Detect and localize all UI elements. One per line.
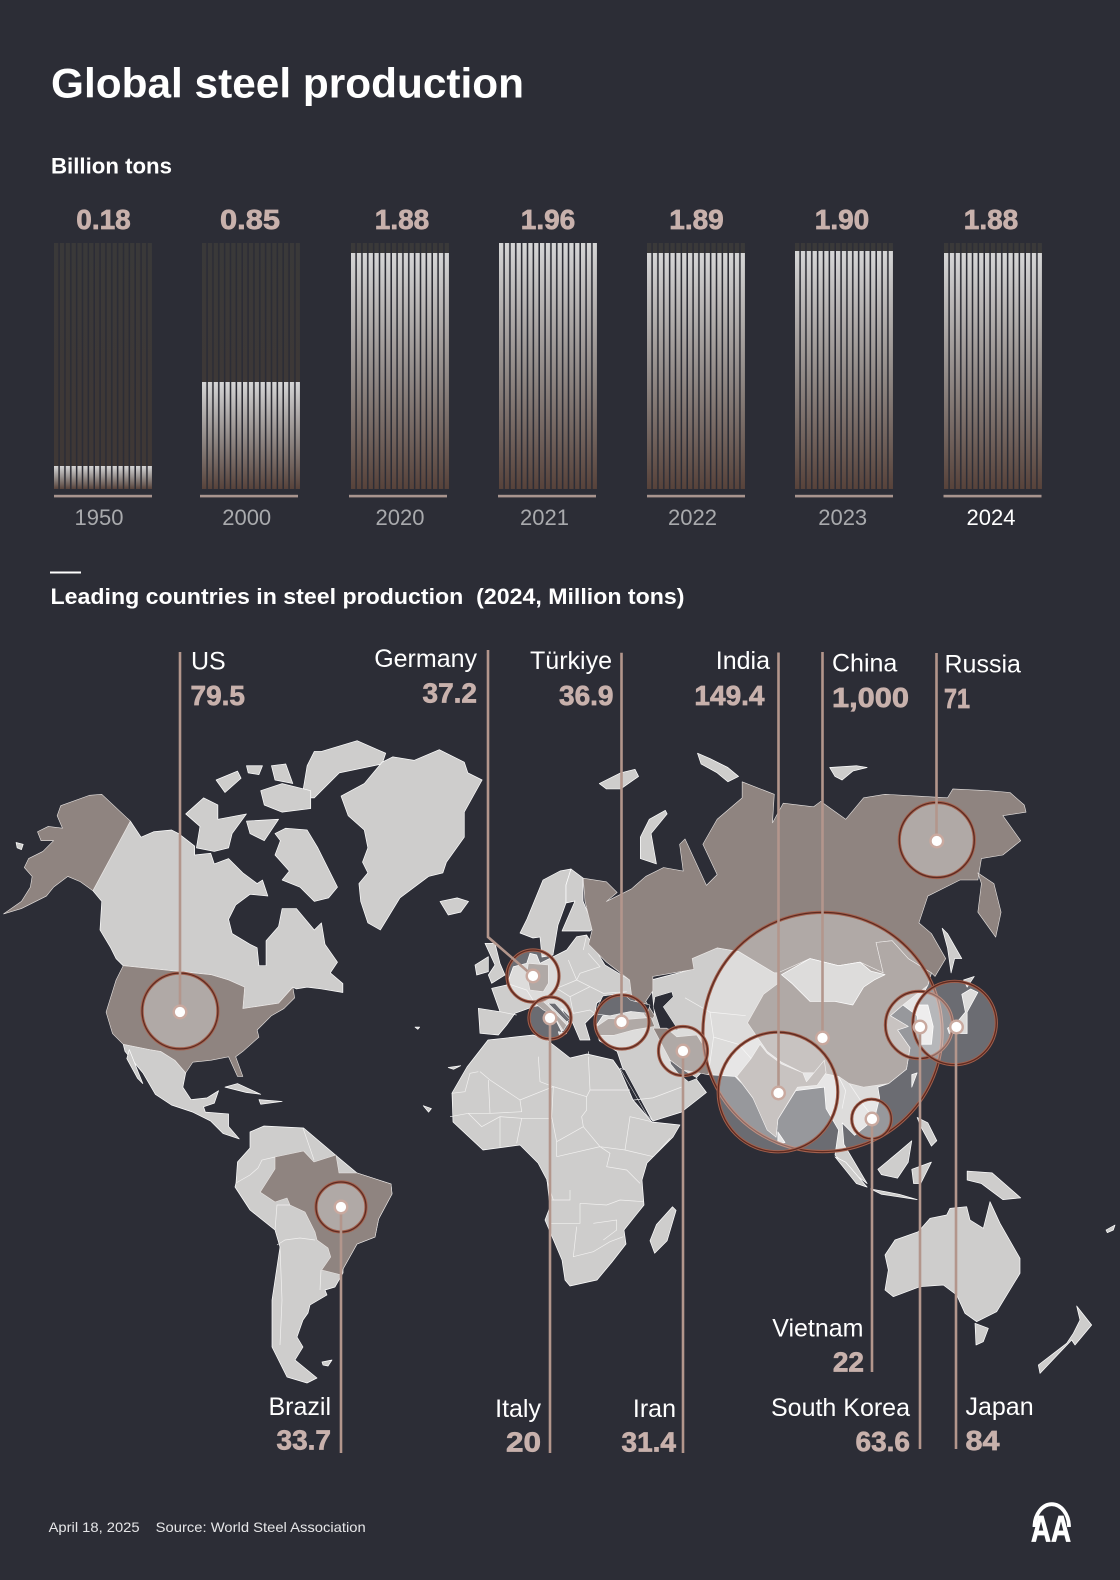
bar 2021: 2021 bbox=[520, 505, 569, 530]
bar 2000: 0.85 bbox=[220, 204, 280, 235]
label: Iran: 31.4 bbox=[622, 1426, 676, 1458]
label: Brazil bbox=[268, 1393, 331, 1456]
label: Japan: Japan bbox=[966, 1393, 1034, 1421]
label: Italy: Italy bbox=[495, 1395, 541, 1423]
label: Italy bbox=[495, 1395, 541, 1458]
bar 2020 bbox=[349, 204, 449, 530]
marker: Iran bbox=[658, 1026, 708, 1453]
label: Japan bbox=[966, 1393, 1034, 1456]
label: South Korea bbox=[771, 1394, 910, 1457]
label: US: US bbox=[191, 648, 226, 676]
bar 1950: 0.18 bbox=[76, 204, 131, 235]
label: Vietnam: 22 bbox=[833, 1346, 864, 1378]
map: Scandinavia bbox=[520, 869, 594, 957]
label: US: 79.5 bbox=[190, 680, 245, 711]
marker: South Korea bbox=[885, 991, 953, 1059]
footer: date and source: April 18, 2025 bbox=[49, 1519, 140, 1535]
label: Brazil: 33.7 bbox=[276, 1424, 331, 1456]
marker: Italy bbox=[529, 997, 571, 1453]
label: Türkiye: Türkiye bbox=[530, 647, 612, 675]
label: South Korea: 63.6 bbox=[856, 1426, 910, 1457]
label: Japan: 84 bbox=[966, 1425, 1000, 1456]
label: India: India bbox=[716, 647, 770, 675]
bar 2024: 1.88 bbox=[964, 204, 1018, 235]
label: Russia bbox=[944, 650, 1021, 714]
label: Vietnam bbox=[772, 1314, 864, 1378]
label: China: China bbox=[832, 650, 897, 678]
subtitle: unit: Billion tons bbox=[51, 154, 172, 178]
map: Americas bbox=[4, 741, 482, 1139]
bar 2024: 2024 bbox=[967, 505, 1015, 530]
map: South America bbox=[235, 1126, 392, 1383]
bar 2023 bbox=[795, 204, 893, 530]
label: Iran: Iran bbox=[633, 1395, 676, 1423]
marker: Brazil bbox=[316, 1182, 366, 1453]
bar 2020: 2020 bbox=[376, 505, 424, 530]
bar 2023: 1.90 bbox=[815, 204, 869, 235]
world map bbox=[4, 650, 1115, 1453]
icon: AA logo bbox=[1031, 1504, 1071, 1550]
bar 2022: 2022 bbox=[668, 505, 717, 530]
bar 2022: 1.89 bbox=[669, 204, 724, 235]
title: Global steel production bbox=[51, 60, 524, 106]
section heading: leading countries: Leading countries in steel production (2024, Million tons) bbox=[50, 584, 685, 609]
bar chart: yearly production bbox=[54, 204, 1042, 530]
marker: Russia bbox=[899, 653, 974, 878]
label: Germany bbox=[374, 645, 477, 708]
label: Brazil: Brazil bbox=[268, 1393, 331, 1421]
bar 2021 bbox=[498, 204, 597, 530]
marker: Türkiye bbox=[595, 653, 649, 1049]
label: US bbox=[190, 648, 245, 711]
bar 2000: 2000 bbox=[222, 505, 271, 530]
bar 1950: 1950 bbox=[75, 505, 123, 530]
map: Russia and Asia bbox=[583, 753, 1026, 1253]
label: South Korea: South Korea bbox=[771, 1394, 910, 1422]
marker: Germany bbox=[488, 650, 559, 1002]
label: India bbox=[694, 647, 770, 711]
label: India: 149.4 bbox=[694, 680, 765, 711]
label: Vietnam: Vietnam bbox=[772, 1314, 864, 1342]
label: China: 1,000 bbox=[832, 682, 909, 713]
bar 1950 bbox=[54, 204, 152, 530]
label: Italy: 20 bbox=[506, 1426, 541, 1458]
bar 2022 bbox=[647, 204, 745, 530]
label: Iran bbox=[622, 1395, 676, 1458]
bar 2021: 1.96 bbox=[521, 204, 575, 235]
bar 2024 bbox=[944, 204, 1042, 530]
label: Germany: Germany bbox=[374, 645, 477, 673]
marker: Japan bbox=[913, 981, 996, 1449]
label: Russia: 71 bbox=[944, 683, 970, 714]
marker: China bbox=[703, 652, 942, 1152]
label: Türkiye bbox=[530, 647, 614, 711]
label: China bbox=[832, 650, 909, 713]
marker: India bbox=[718, 652, 838, 1152]
marker: South Korea line and dot bbox=[914, 1021, 926, 1449]
icon: AA logo: AA bbox=[1031, 1509, 1071, 1550]
map: Europe bbox=[475, 935, 633, 1040]
label: Russia: Russia bbox=[944, 650, 1021, 678]
label: Türkiye: 36.9 bbox=[559, 680, 614, 711]
marker: US bbox=[142, 652, 218, 1049]
footer: date and source: Source: World Steel Association bbox=[156, 1519, 366, 1535]
bubbles and leader lines bbox=[142, 650, 996, 1453]
map: Oceania bbox=[885, 1202, 1115, 1373]
bar 2023: 2023 bbox=[818, 505, 867, 530]
marker: Vietnam bbox=[852, 1099, 891, 1372]
map: Africa bbox=[450, 1035, 680, 1286]
footer: date and source bbox=[49, 1519, 366, 1535]
bar 2020: 1.88 bbox=[375, 204, 429, 235]
bar 2000 bbox=[200, 204, 300, 530]
label: Germany: 37.2 bbox=[422, 678, 477, 708]
